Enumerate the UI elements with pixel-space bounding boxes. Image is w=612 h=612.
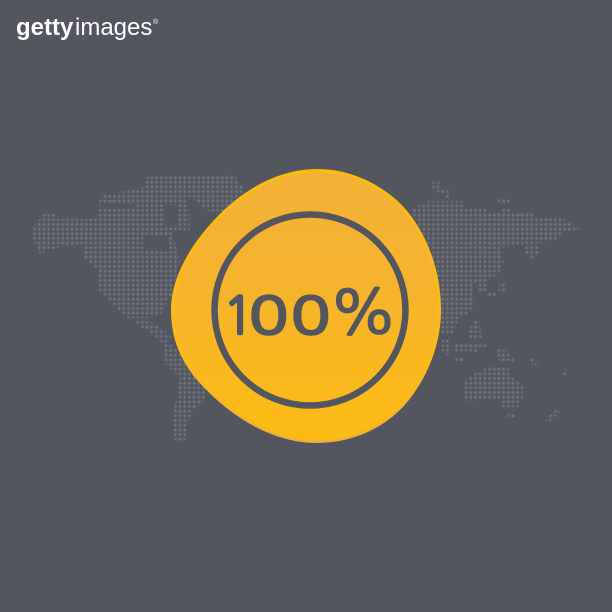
- map: Southeast Asia: [478, 283, 505, 296]
- blob: inner face: [174, 172, 438, 441]
- map: South America: [163, 345, 205, 441]
- map: Pacific islands: [528, 357, 566, 375]
- map: Eurasia and Africa: [410, 201, 579, 334]
- logo: gettyimages: images: [75, 14, 152, 41]
- value: 100%: 1: [223, 291, 254, 342]
- blob: outer rim: [171, 169, 441, 443]
- map: Australia: [464, 367, 523, 407]
- map: Central America: [135, 320, 172, 345]
- value: 100%: 0: [291, 291, 330, 342]
- map: northern islands: [496, 199, 510, 214]
- logo: gettyimages: getty: [16, 14, 74, 41]
- logo: gettyimages: ®: [153, 18, 159, 26]
- value: 100%: %: [329, 282, 398, 343]
- map: Japan and Kamchatka: [525, 245, 538, 259]
- logo: gettyimages: [16, 14, 159, 41]
- dotted world map: [33, 174, 579, 441]
- map: Tasmania and New Zealand: [508, 408, 560, 421]
- value: 100%: 0: [249, 291, 288, 342]
- map: Indonesia: [442, 321, 515, 362]
- value: 100%: [223, 282, 398, 343]
- ring: [214, 214, 406, 406]
- map: Arctic islands: [431, 182, 449, 199]
- yellow blob badge: [171, 169, 441, 443]
- map: North America: [33, 174, 245, 318]
